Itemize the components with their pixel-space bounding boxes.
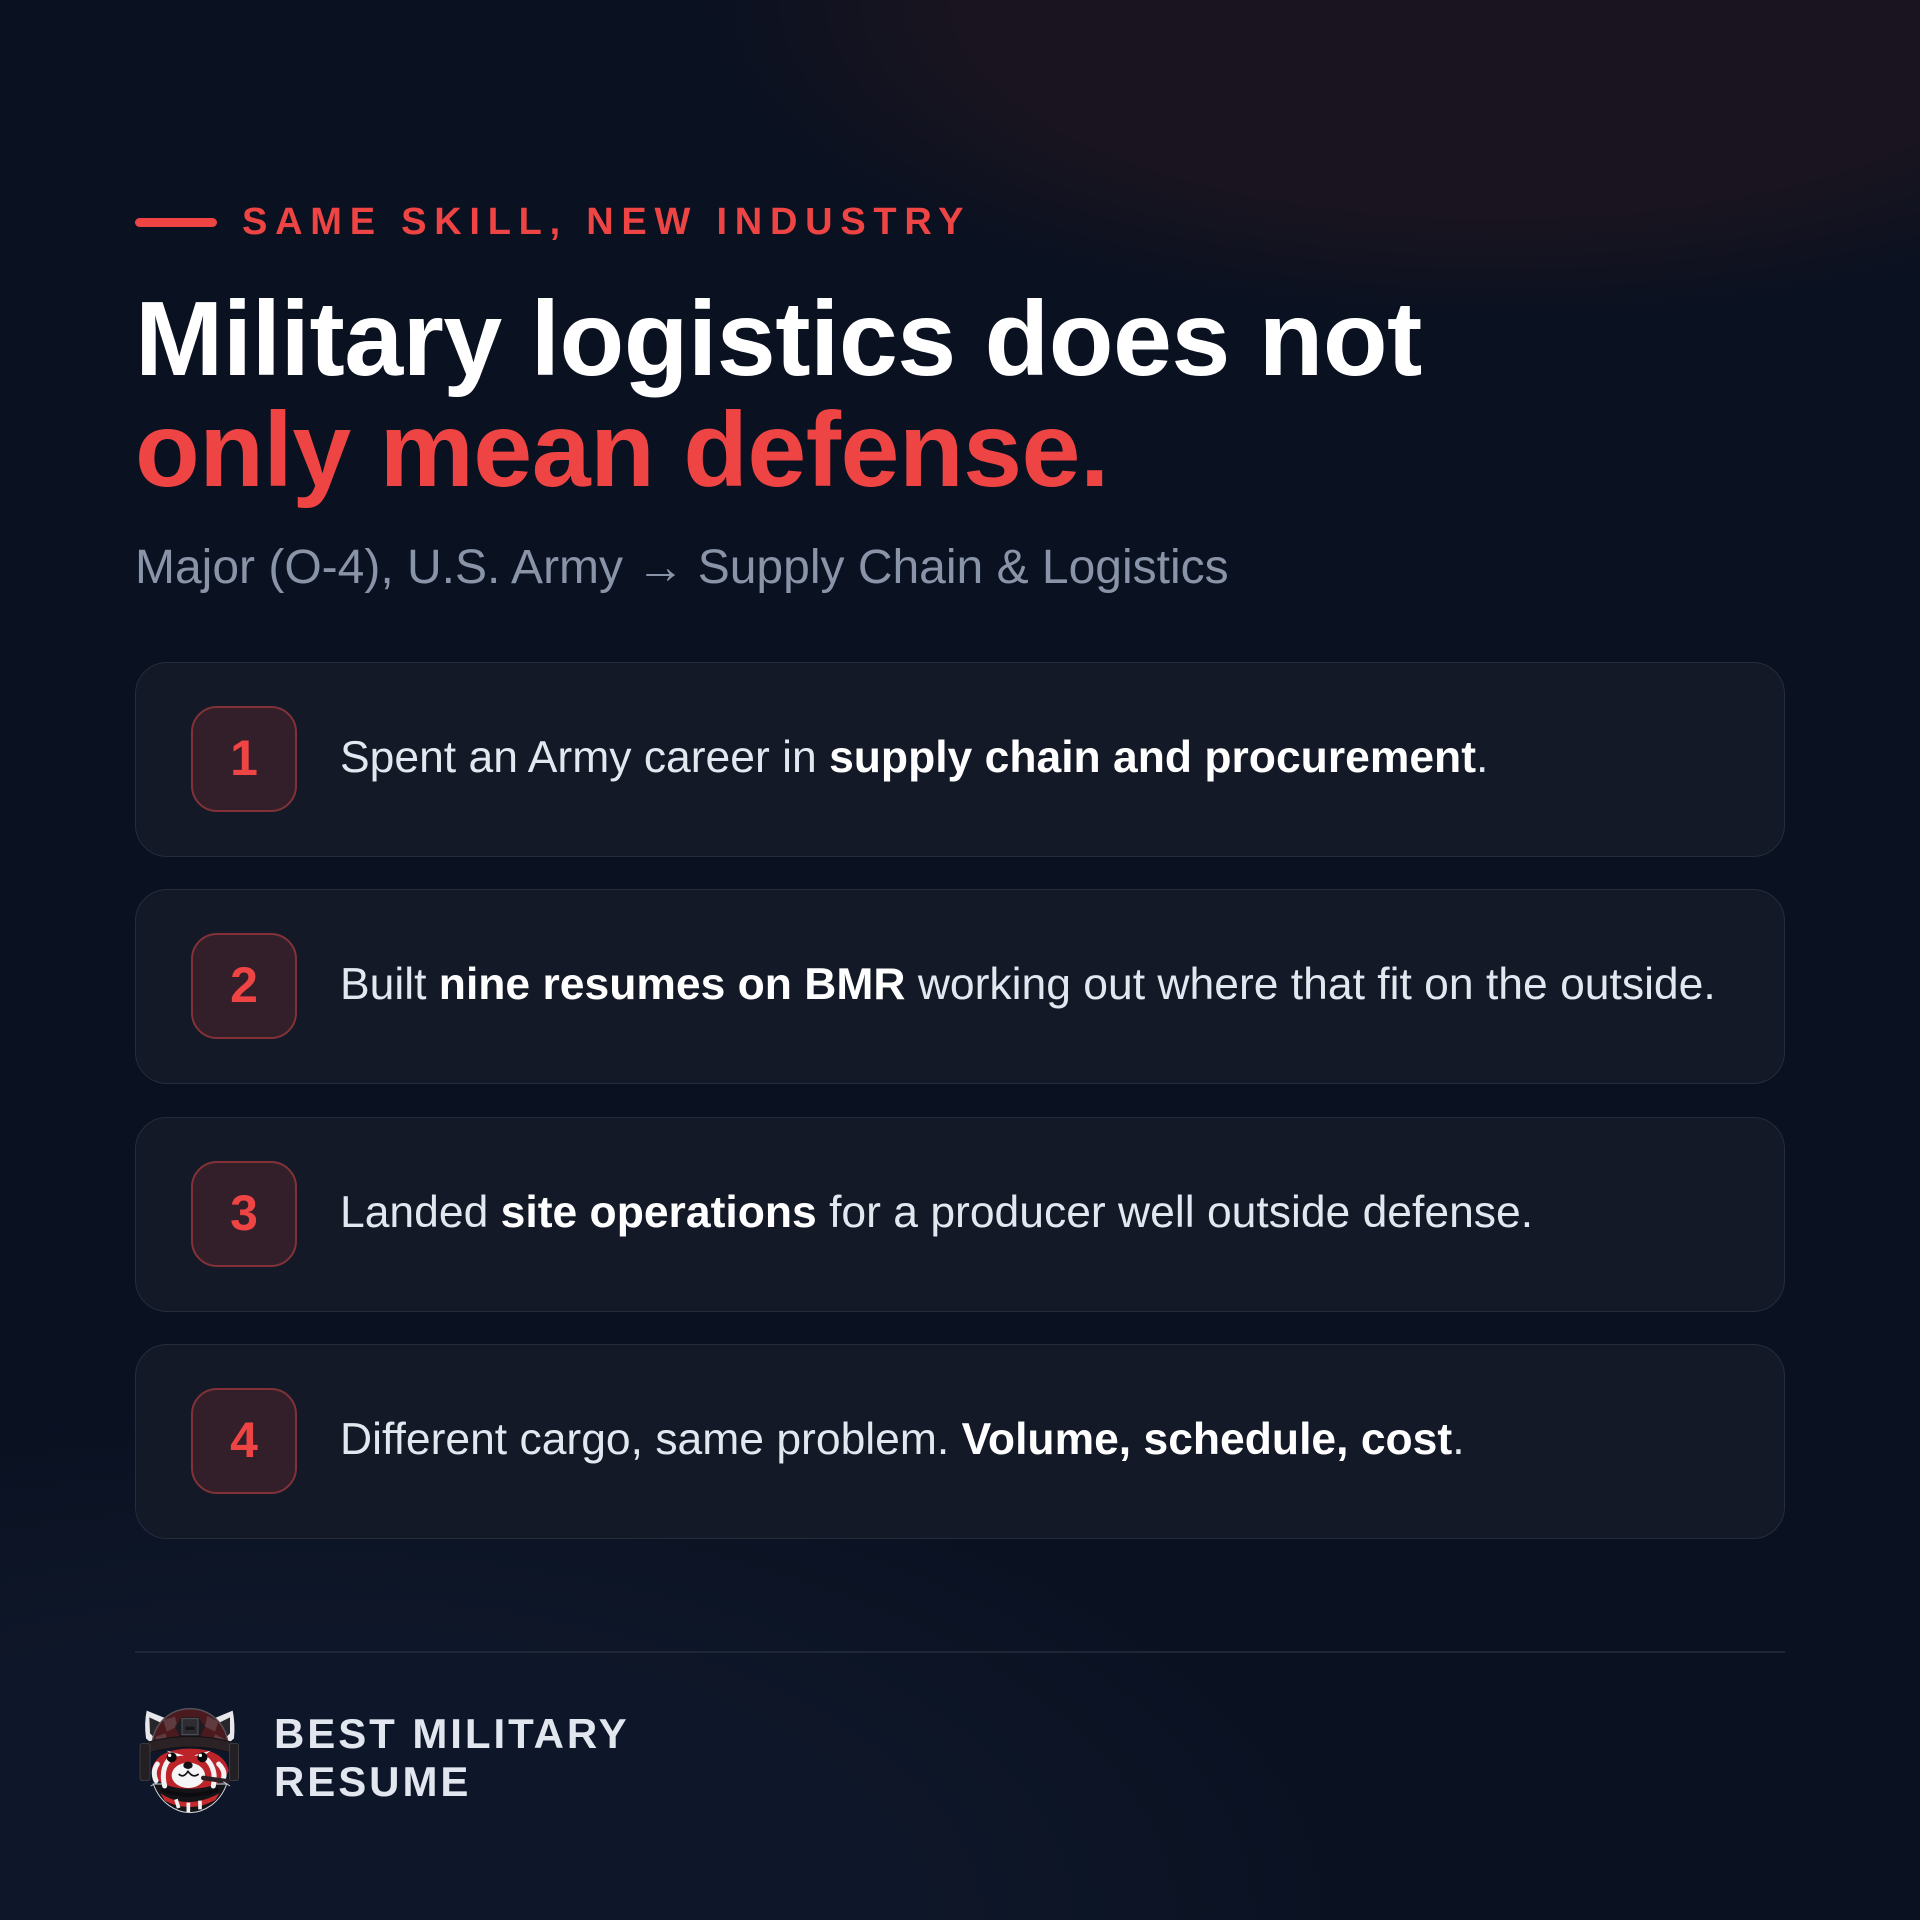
number badge 3: 3 (230, 1185, 258, 1241)
title: Military logistics does not (135, 280, 1422, 398)
panel: step 4 (135, 1344, 1785, 1539)
panel: step 2 (135, 889, 1785, 1084)
ears (145, 1711, 168, 1745)
eyes (167, 1752, 177, 1762)
face (152, 1749, 229, 1789)
title: only mean defense. (135, 391, 1109, 509)
brand name (274, 1710, 630, 1805)
number badge 4 (191, 1388, 297, 1494)
panel: step 1 (135, 662, 1785, 857)
panel: step 3 (135, 1117, 1785, 1312)
number badge 1: 1 (230, 730, 258, 786)
brand name: BEST MILITARY (274, 1710, 630, 1757)
number badge 1 (191, 706, 297, 812)
helmet (152, 1709, 228, 1747)
eyebrow dash (135, 218, 217, 227)
icon: red panda in helmet logo (140, 1708, 239, 1814)
number badge 3 (191, 1161, 297, 1267)
mic boom (203, 1778, 227, 1781)
number badge 2 (191, 933, 297, 1039)
scarf (153, 1784, 227, 1813)
subtitle: Major (O-4), U.S. Army → Supply Chain & Logistics (135, 541, 1229, 594)
eyebrow text: SAME SKILL, NEW INDUSTRY (242, 201, 971, 243)
number badge 4: 4 (230, 1412, 258, 1468)
title (135, 280, 1422, 509)
footer brand (140, 1708, 630, 1814)
eyebrow (135, 201, 971, 243)
step 4 text: Different cargo, same problem. Volume, schedule, cost. (340, 1415, 1465, 1464)
nose and mouth (183, 1762, 193, 1769)
number badge 2: 2 (230, 957, 258, 1013)
step 3 text: Landed site operations for a producer well outside defense. (340, 1188, 1533, 1237)
step 2 text: Built nine resumes on BMR working out where that fit on the outside. (340, 960, 1716, 1009)
step 1 text: Spent an Army career in supply chain and procurement. (340, 733, 1488, 782)
brand name: RESUME (274, 1758, 471, 1805)
